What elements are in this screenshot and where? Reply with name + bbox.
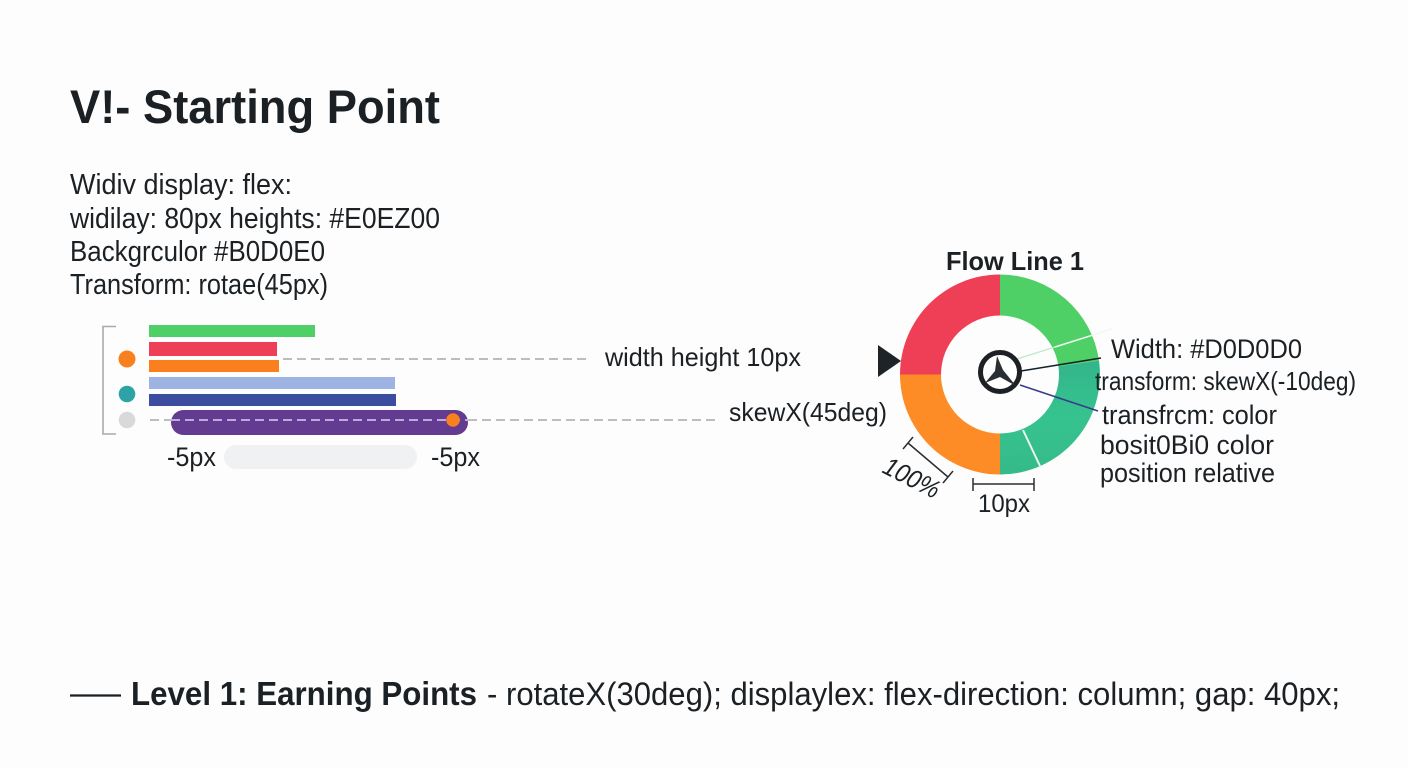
bar: green <box>149 325 315 337</box>
footer rule <box>70 694 121 697</box>
segment: teal <box>1000 361 1100 474</box>
connector: dashed line through pill <box>171 419 468 421</box>
segment: red <box>900 274 1000 374</box>
label: skewX: skewX(45deg) <box>729 397 887 427</box>
title: V!- Starting Point <box>70 80 440 133</box>
icon: steering wheel <box>980 352 1020 392</box>
footer text: - rotateX(30deg); displaylex: flex-direction: column; gap: 40px; <box>487 676 1340 712</box>
dimension: 100%: 100% <box>878 451 945 505</box>
footer heading: Level 1: Earning Points <box>131 675 477 712</box>
text block: css properties: Backgrculor #B0D0E0 <box>70 236 325 268</box>
bar: light blue <box>149 377 395 389</box>
pointer: black triangle <box>878 345 901 377</box>
label: left offset: -5px <box>167 442 216 472</box>
connector: dashed line left <box>150 419 171 421</box>
bar: navy <box>149 394 396 406</box>
bar chart <box>103 325 715 472</box>
bar: orange <box>149 360 279 372</box>
callout labels: position relative <box>1100 458 1275 488</box>
dimension: 10px: 10px <box>978 490 1030 518</box>
callout labels <box>1095 334 1356 488</box>
label: width height: width height 10px <box>604 342 801 372</box>
donut chart <box>900 274 1100 474</box>
legend dots <box>118 350 136 428</box>
donut heading: Flow Line 1 <box>946 246 1084 276</box>
connector: dashed line right <box>468 419 715 421</box>
bar: purple pill <box>171 410 468 435</box>
segment: green <box>1000 274 1099 366</box>
leader lines <box>1017 329 1112 411</box>
callout labels: bosit0Bi0 color <box>1100 430 1274 460</box>
text block: css properties: Widiv display: flex: <box>70 169 292 201</box>
segment: orange <box>900 374 1000 474</box>
dimension: 10px <box>973 478 1034 518</box>
divider: teal segment <box>1023 430 1040 466</box>
text block: css properties: widilay: 80px heights: #E0EZ00 <box>69 203 440 235</box>
text block: css properties: Transform: rotae(45px) <box>70 269 328 301</box>
track: gray pill <box>224 445 417 469</box>
callout labels: transfrcm: color <box>1102 400 1277 430</box>
footer <box>70 675 1340 712</box>
bar: red <box>149 342 277 356</box>
label: right offset: -5px <box>431 442 480 472</box>
connector: upper dashed line <box>283 358 588 360</box>
marker: orange dot <box>446 413 460 427</box>
callout labels: transform: skewX(-10deg) <box>1095 366 1356 396</box>
callout labels: Width: #D0D0D0 <box>1111 334 1302 364</box>
text block: css properties <box>69 169 440 301</box>
bracket <box>103 326 116 434</box>
